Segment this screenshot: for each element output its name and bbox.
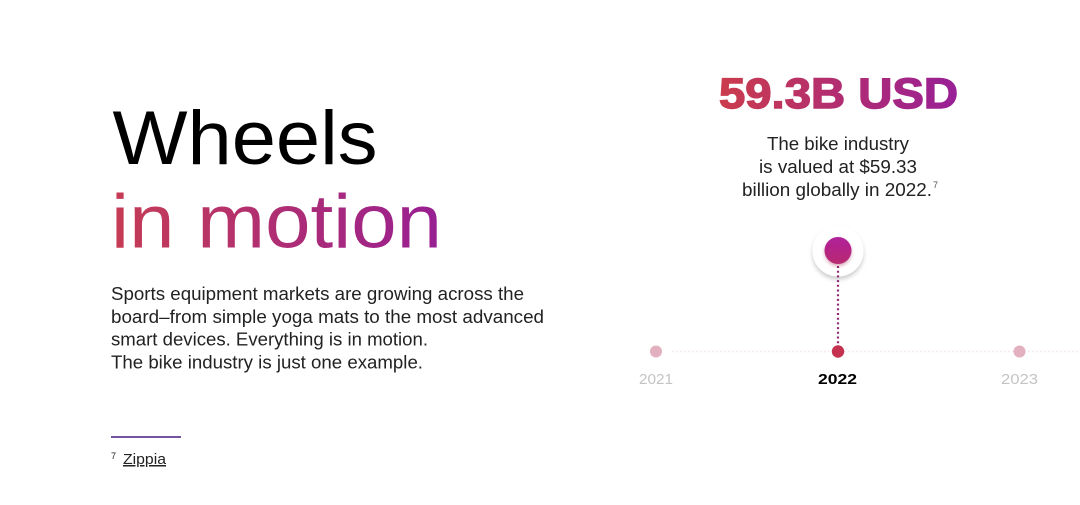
point: 2023 (1014, 346, 1026, 358)
value description: 7 (933, 180, 938, 190)
marker: 2022 value (824, 237, 852, 264)
footnote rule (111, 436, 181, 438)
point: 2021 (650, 346, 662, 358)
value description: is valued at $59.33 (759, 157, 917, 177)
marker halo (812, 226, 864, 276)
timeline axis (672, 350, 1080, 352)
value description: The bike industry (767, 134, 909, 154)
headline value: 59.3B USD (719, 70, 958, 118)
value description: billion globally in 2022. (742, 180, 932, 200)
intro paragraph: board–from simple yoga mats to the most advanced (111, 307, 544, 327)
title: Wheels (112, 96, 378, 181)
title: in motion (111, 180, 442, 264)
point: 2022 (832, 345, 844, 358)
intro paragraph: Sports equipment markets are growing across the (111, 284, 524, 304)
dotted connector (837, 266, 839, 346)
intro paragraph (111, 284, 544, 372)
title (111, 96, 442, 264)
label: 2022: 2022 (818, 372, 857, 388)
label: 2021: 2021 (639, 372, 673, 388)
intro paragraph: smart devices. Everything is in motion. (111, 330, 428, 350)
intro paragraph: The bike industry is just one example. (111, 352, 423, 372)
footnote source: 7 (111, 451, 116, 461)
label: 2023: 2023 (1001, 372, 1038, 388)
value description (742, 134, 938, 200)
footnote source: Zippia (123, 451, 167, 468)
timeline (639, 226, 1080, 388)
